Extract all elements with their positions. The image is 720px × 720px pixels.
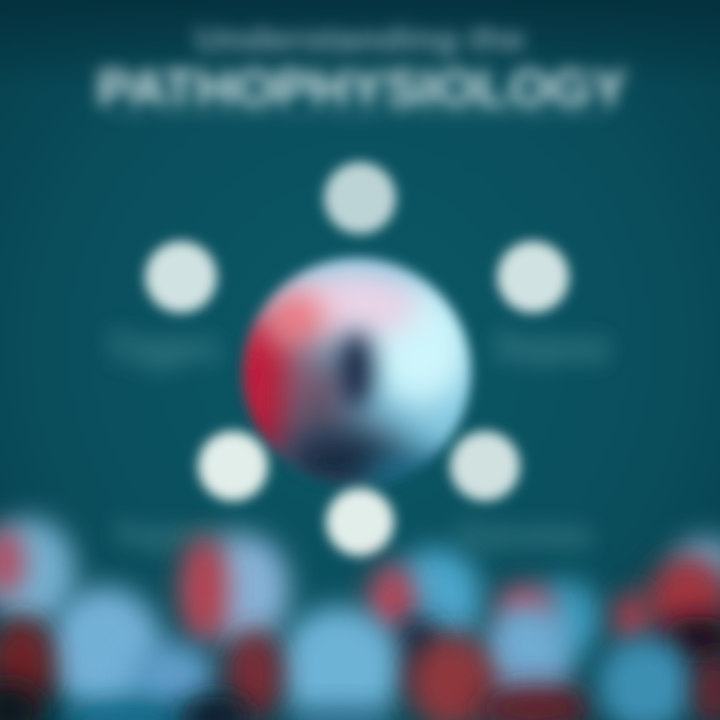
sphere: far left (0, 518, 76, 626)
sphere: back centre (368, 548, 482, 693)
sphere: back right (497, 580, 601, 656)
sphere: front right (597, 637, 720, 720)
sphere: lilac top (280, 269, 420, 341)
node: top (324, 162, 396, 234)
node: upper left (145, 241, 217, 313)
sphere: lower right blue shadow (354, 431, 447, 489)
title: top line: Understanding the (195, 21, 525, 57)
node: lower left (198, 431, 268, 501)
sphere: back centre left (180, 534, 290, 646)
node: lower right (450, 431, 520, 501)
title block (97, 21, 627, 123)
caption: lower left: Progression (116, 513, 244, 557)
sphere: pink upper left (265, 290, 325, 350)
node captions (107, 323, 609, 557)
sphere: dark lower shadow (270, 422, 410, 502)
title: subtitle: Key mechanisms and stages of disease progression (110, 109, 610, 123)
sphere: front centre right (408, 604, 593, 720)
sphere: muted centre left (286, 348, 350, 448)
sphere: light highlight (370, 285, 470, 405)
sphere: front centre (179, 606, 402, 720)
node circles (145, 162, 569, 556)
sphere: base light blue (237, 252, 477, 492)
caption: lower right: Outcomes (458, 513, 592, 557)
foreground spheres (0, 518, 720, 720)
node: bottom (326, 488, 394, 556)
sphere: red left edge (222, 312, 302, 468)
title: main heading: PATHOPHYSIOLOGY (97, 60, 627, 118)
sphere: dark figure (338, 332, 374, 408)
caption: upper right: Response (497, 323, 609, 372)
sphere: front left (0, 586, 216, 720)
node: upper right (497, 241, 569, 313)
sphere: far right (614, 536, 720, 664)
central sphere (222, 252, 477, 508)
caption: upper left: Triggers (107, 323, 219, 372)
